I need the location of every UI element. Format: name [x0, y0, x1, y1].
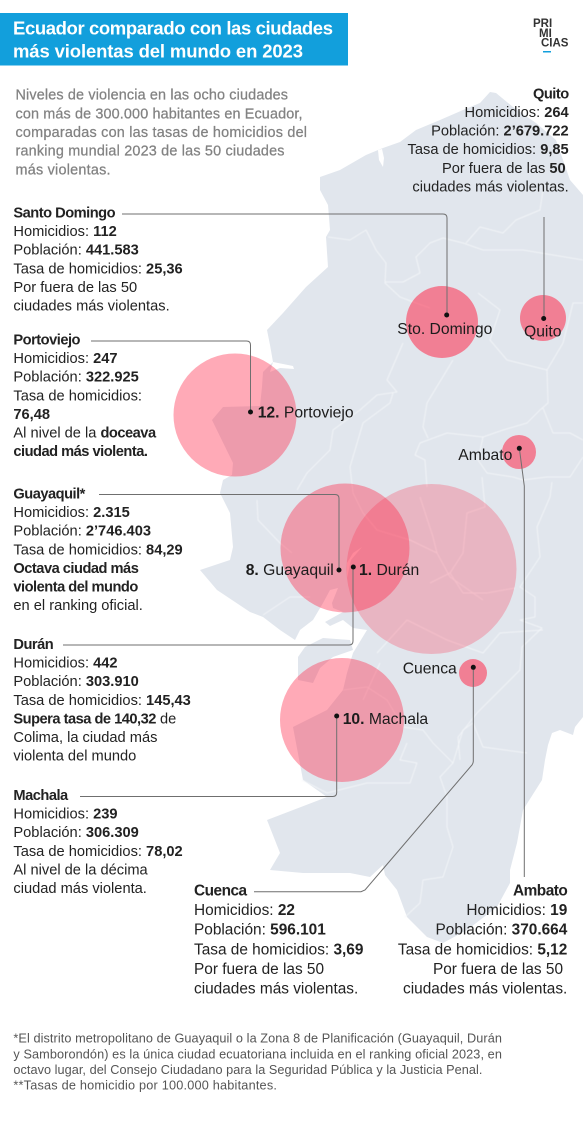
data block: Santo Domingo: Homicidios: 112	[13, 224, 117, 240]
connector: Machala	[80, 716, 337, 796]
data block: Portoviejo: Tasa de homicidios:	[13, 388, 142, 404]
circle: Portoviejo	[174, 354, 296, 476]
connector: Quito	[543, 217, 545, 318]
data block: Santo Domingo: Por fuera de las 50	[13, 280, 137, 296]
logo: Primicias: CIAS	[541, 38, 569, 50]
data block: Ambato: Homicidios: 19	[466, 902, 567, 919]
title banner	[0, 13, 348, 66]
logo: Primicias	[533, 18, 569, 52]
data block: Portoviejo: Población: 322.925	[13, 370, 139, 386]
data block: Ambato: Población: 370.664	[436, 922, 568, 939]
map label: Quito: Quito	[524, 324, 562, 341]
data block: Quito: ciudades más violentas.	[412, 179, 569, 195]
logo: Primicias: MI	[539, 28, 552, 40]
data block: Durán: Colima, la ciudad más	[13, 730, 157, 746]
footnote: octavo lugar, del Consejo Ciudadano para la Seguridad Pública y la Justicia Penal.	[13, 1063, 482, 1077]
data block: Guayaquil	[13, 486, 183, 614]
data block: Cuenca	[194, 882, 363, 998]
island: Puná	[298, 638, 353, 683]
circle: Santo Domingo	[406, 286, 478, 358]
connector: Guayaquil	[99, 494, 339, 570]
map label: Portoviejo: 12. Portoviejo	[258, 404, 354, 421]
data block: Santo Domingo: Santo Domingo	[13, 206, 116, 222]
data block: Portoviejo: 76,48	[13, 407, 50, 423]
estuary and inlets	[270, 149, 384, 578]
data block: Santo Domingo: ciudades más violentas.	[13, 298, 170, 314]
data block: Ambato: Tasa de homicidios: 5,12	[398, 941, 567, 958]
map label: Sto. Domingo: Sto. Domingo	[397, 321, 493, 338]
data block: Durán: Homicidios: 442	[13, 656, 118, 672]
data block: Guayaquil: Población: 2’746.403	[13, 524, 151, 540]
data block: Guayaquil: Tasa de homicidios: 84,29	[13, 542, 183, 558]
data block: Portoviejo: ciudad más violenta.	[13, 444, 148, 460]
data block: Cuenca: Tasa de homicidios: 3,69	[194, 941, 363, 958]
logo: Primicias: PRI	[533, 18, 552, 30]
data block: Machala	[13, 788, 183, 897]
circle: Guayaquil	[280, 484, 410, 612]
intro text	[16, 88, 307, 178]
data block: Cuenca: Homicidios: 22	[194, 902, 295, 919]
data block: Durán: Durán	[13, 637, 54, 653]
data block: Portoviejo: Portoviejo	[13, 332, 81, 348]
connector: Cuenca	[254, 667, 473, 892]
data block: Cuenca: Cuenca	[194, 882, 248, 899]
data block: Quito: Población: 2’679.722	[431, 124, 569, 140]
data block: Guayaquil: en el ranking oficial.	[13, 598, 143, 614]
intro text: más violentas.	[16, 162, 110, 178]
title banner: Ecuador comparado con las ciudades	[13, 18, 333, 38]
data block: Cuenca: Población: 596.101	[194, 922, 326, 939]
map label: Machala: 10. Machala	[343, 711, 428, 728]
data block: Quito	[408, 86, 570, 195]
circle: Cuenca	[459, 659, 487, 687]
intro text: ranking mundial 2023 de las 50 ciudades	[16, 144, 284, 160]
map label: Guayaquil: 8. Guayaquil	[246, 562, 334, 579]
data block: Ambato: Por fuera de las 50	[433, 961, 563, 978]
data block: Cuenca: Por fuera de las 50	[194, 961, 324, 978]
footnote: *El distrito metropolitano de Guayaquil o la Zona 8 de Planificación (Guayaquil, Durán	[13, 1032, 502, 1046]
map label: Cuenca: Cuenca	[403, 660, 457, 677]
map of Ecuador	[200, 92, 583, 943]
data block: Machala: ciudad más violenta.	[13, 881, 147, 897]
data block: Portoviejo: Al nivel de la doceava	[13, 426, 157, 442]
connector: Portoviejo	[91, 341, 250, 412]
data block: Portoviejo	[13, 332, 157, 460]
intro text: con más de 300.000 habitantes en Ecuador,	[16, 106, 302, 122]
data block: Guayaquil: violenta del mundo	[13, 580, 138, 596]
intro text: Niveles de violencia en las ocho ciudades	[16, 88, 288, 104]
data block: Santo Domingo: Tasa de homicidios: 25,36	[13, 261, 183, 277]
data block: Guayaquil: Homicidios: 2.315	[13, 505, 130, 521]
data block: Ambato: Ambato	[513, 882, 567, 899]
data block: Quito: Homicidios: 264	[465, 105, 570, 121]
data block: Guayaquil: Octava ciudad más	[13, 561, 139, 577]
data block: Durán	[13, 637, 191, 765]
connector: Durán	[63, 567, 353, 645]
data block: Machala: Homicidios: 239	[13, 807, 118, 823]
footnote: y Samborondón) es la única ciudad ecuatoriana incluida en el ranking oficial 2023, en	[13, 1047, 502, 1061]
map label: Durán: 1. Durán	[359, 562, 419, 579]
connector: Santo Domingo	[122, 214, 447, 315]
data block: Quito: Quito	[533, 86, 569, 102]
data block: Portoviejo: Homicidios: 247	[13, 351, 118, 367]
provincial borders	[257, 190, 583, 917]
data block: Machala: Tasa de homicidios: 78,02	[13, 844, 183, 860]
title banner: más violentas del mundo en 2023	[13, 40, 303, 62]
data block: Durán: Población: 303.910	[13, 674, 139, 690]
data block: Durán: Supera tasa de 140,32 de	[13, 711, 176, 727]
circle: Ambato	[502, 435, 536, 469]
data block: Durán: Tasa de homicidios: 145,43	[13, 693, 191, 709]
circle: Durán	[346, 484, 516, 654]
data block: Durán: violenta del mundo	[13, 749, 136, 765]
data block: Machala: Al nivel de la décima	[13, 862, 149, 878]
data block: Machala: Población: 306.309	[13, 825, 139, 841]
data block: Santo Domingo: Población: 441.583	[13, 243, 139, 259]
circle: Machala	[280, 658, 404, 782]
data block: Quito: Tasa de homicidios: 9,85	[408, 142, 569, 158]
intro text: comparadas con las tasas de homicidios del	[16, 125, 307, 141]
footnote	[13, 1032, 502, 1093]
circle: Quito	[520, 295, 566, 341]
data block: Ambato: ciudades más violentas.	[403, 981, 567, 998]
data block: Quito: Por fuera de las 50	[442, 161, 566, 177]
data block: Machala: Machala	[13, 788, 69, 804]
data block: Cuenca: ciudades más violentas.	[194, 981, 358, 998]
data block: Guayaquil: Guayaquil*	[13, 486, 86, 502]
footnote: **Tasas de homicidio por 100.000 habitantes.	[13, 1079, 277, 1093]
location dots	[248, 312, 546, 718]
data block: Ambato	[398, 882, 568, 998]
map label: Ambato: Ambato	[458, 447, 513, 464]
connector: Ambato	[519, 448, 524, 877]
data block: Santo Domingo	[13, 206, 183, 314]
